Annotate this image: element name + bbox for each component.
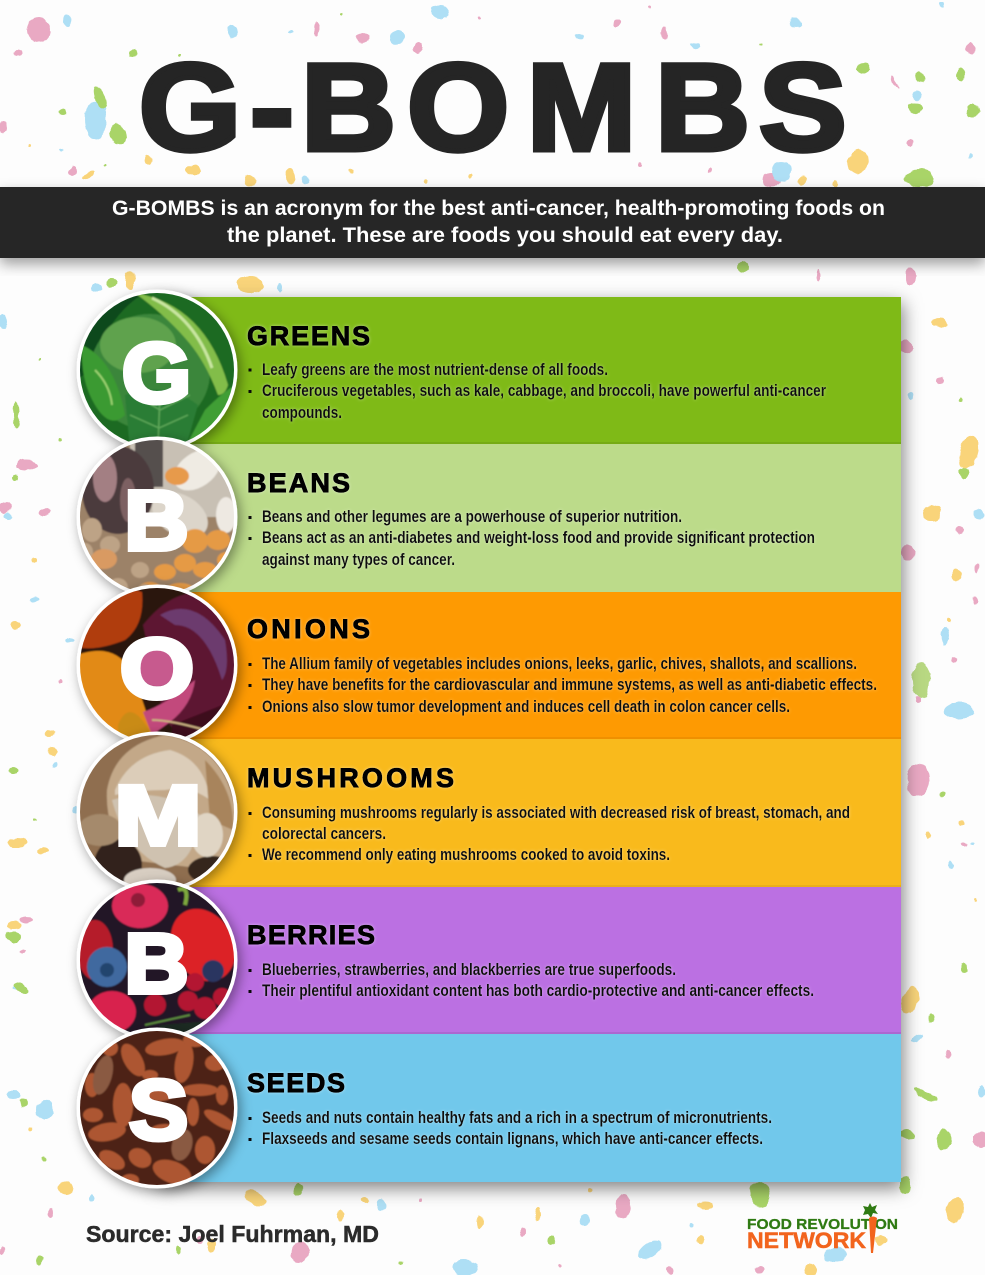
bullet list: seeds: Seeds and nuts contain healthy fats and a rich in a spectrum of micronutrients. xyxy=(262,1108,772,1127)
heading: onions: ONIONS xyxy=(247,614,370,644)
badge: M mushrooms xyxy=(76,732,238,892)
panel: mushrooms xyxy=(157,739,901,887)
logo: Food Revolution Network: FOOD REVOLUTION xyxy=(747,1217,898,1233)
panel: beans xyxy=(157,444,901,592)
heading: mushrooms: MUSHROOMS xyxy=(247,763,454,793)
logo: Food Revolution Network: NETWORK xyxy=(747,1228,866,1253)
bullet list: mushrooms xyxy=(248,803,850,864)
panel: bands backing shadow xyxy=(157,297,901,1182)
bullet list: seeds xyxy=(248,1108,772,1148)
intro banner: G-BOMBS is an acronym for the best anti-cancer, health-promoting foods on xyxy=(112,197,885,220)
heading: berries: BERRIES xyxy=(247,920,375,950)
badge: O onions xyxy=(76,584,238,746)
title: G-BOMBS xyxy=(139,38,847,177)
bullet list: beans xyxy=(248,507,815,569)
bullet list: greens: compounds. xyxy=(262,403,342,422)
letter S: S xyxy=(129,1063,188,1157)
bullet list: onions xyxy=(248,654,877,716)
source credit: Source: Joel Fuhrman, MD xyxy=(86,1221,379,1247)
heading: greens: GREENS xyxy=(247,321,370,351)
bullet list: mushrooms: Consuming mushrooms regularly is associated with decreased risk of breast, stomach, and xyxy=(262,803,850,822)
letter G: G xyxy=(122,326,191,420)
panel: onions xyxy=(157,592,901,739)
bullet list: beans: against many types of cancer. xyxy=(262,550,455,569)
bullet list: greens: Cruciferous vegetables, such as kale, cabbage, and broccoli, have powerful anti-cancer xyxy=(262,381,826,400)
letter M: M xyxy=(114,768,202,862)
bullet list: onions: Onions also slow tumor development and induces cell death in colon cancer cells. xyxy=(262,697,790,716)
badge: G cabbage xyxy=(76,290,238,450)
letter O: O xyxy=(120,622,194,716)
panel: greens xyxy=(157,297,901,444)
bullet list: greens: Leafy greens are the most nutrient-dense of all foods. xyxy=(262,360,608,379)
bullet list: mushrooms: colorectal cancers. xyxy=(262,824,386,843)
bullet list: greens xyxy=(248,360,826,422)
letter B: B xyxy=(124,474,188,568)
letter B: B xyxy=(124,916,188,1010)
bullet list: beans: Beans act as an anti-diabetes and weight-loss food and provide significant protection xyxy=(262,528,815,547)
bullet list: beans: Beans and other legumes are a powerhouse of superior nutrition. xyxy=(262,507,682,526)
bullet list: berries xyxy=(248,960,814,1000)
panel: seeds xyxy=(157,1034,901,1182)
icon: carrot xyxy=(863,1203,878,1253)
heading: seeds: SEEDS xyxy=(247,1068,345,1098)
badge: S seeds xyxy=(76,1028,239,1189)
intro banner xyxy=(0,187,985,258)
bullet list: seeds: Flaxseeds and sesame seeds contain lignans, which have anti-cancer effects. xyxy=(262,1129,763,1148)
badge: B beans xyxy=(76,436,240,598)
heading: beans: BEANS xyxy=(247,468,350,498)
panel: berries xyxy=(157,887,901,1034)
badge: B berries xyxy=(76,880,248,1040)
bullet list: berries: Their plentiful antioxidant content has both cardio-protective and anti-cancer effects. xyxy=(262,981,814,1000)
logo: Food Revolution Network xyxy=(747,1203,898,1253)
bullet list: berries: Blueberries, strawberries, and blackberries are true superfoods. xyxy=(262,960,676,979)
bullet list: mushrooms: We recommend only eating mushrooms cooked to avoid toxins. xyxy=(262,845,670,864)
intro banner: the planet. These are foods you should eat every day. xyxy=(227,224,783,247)
